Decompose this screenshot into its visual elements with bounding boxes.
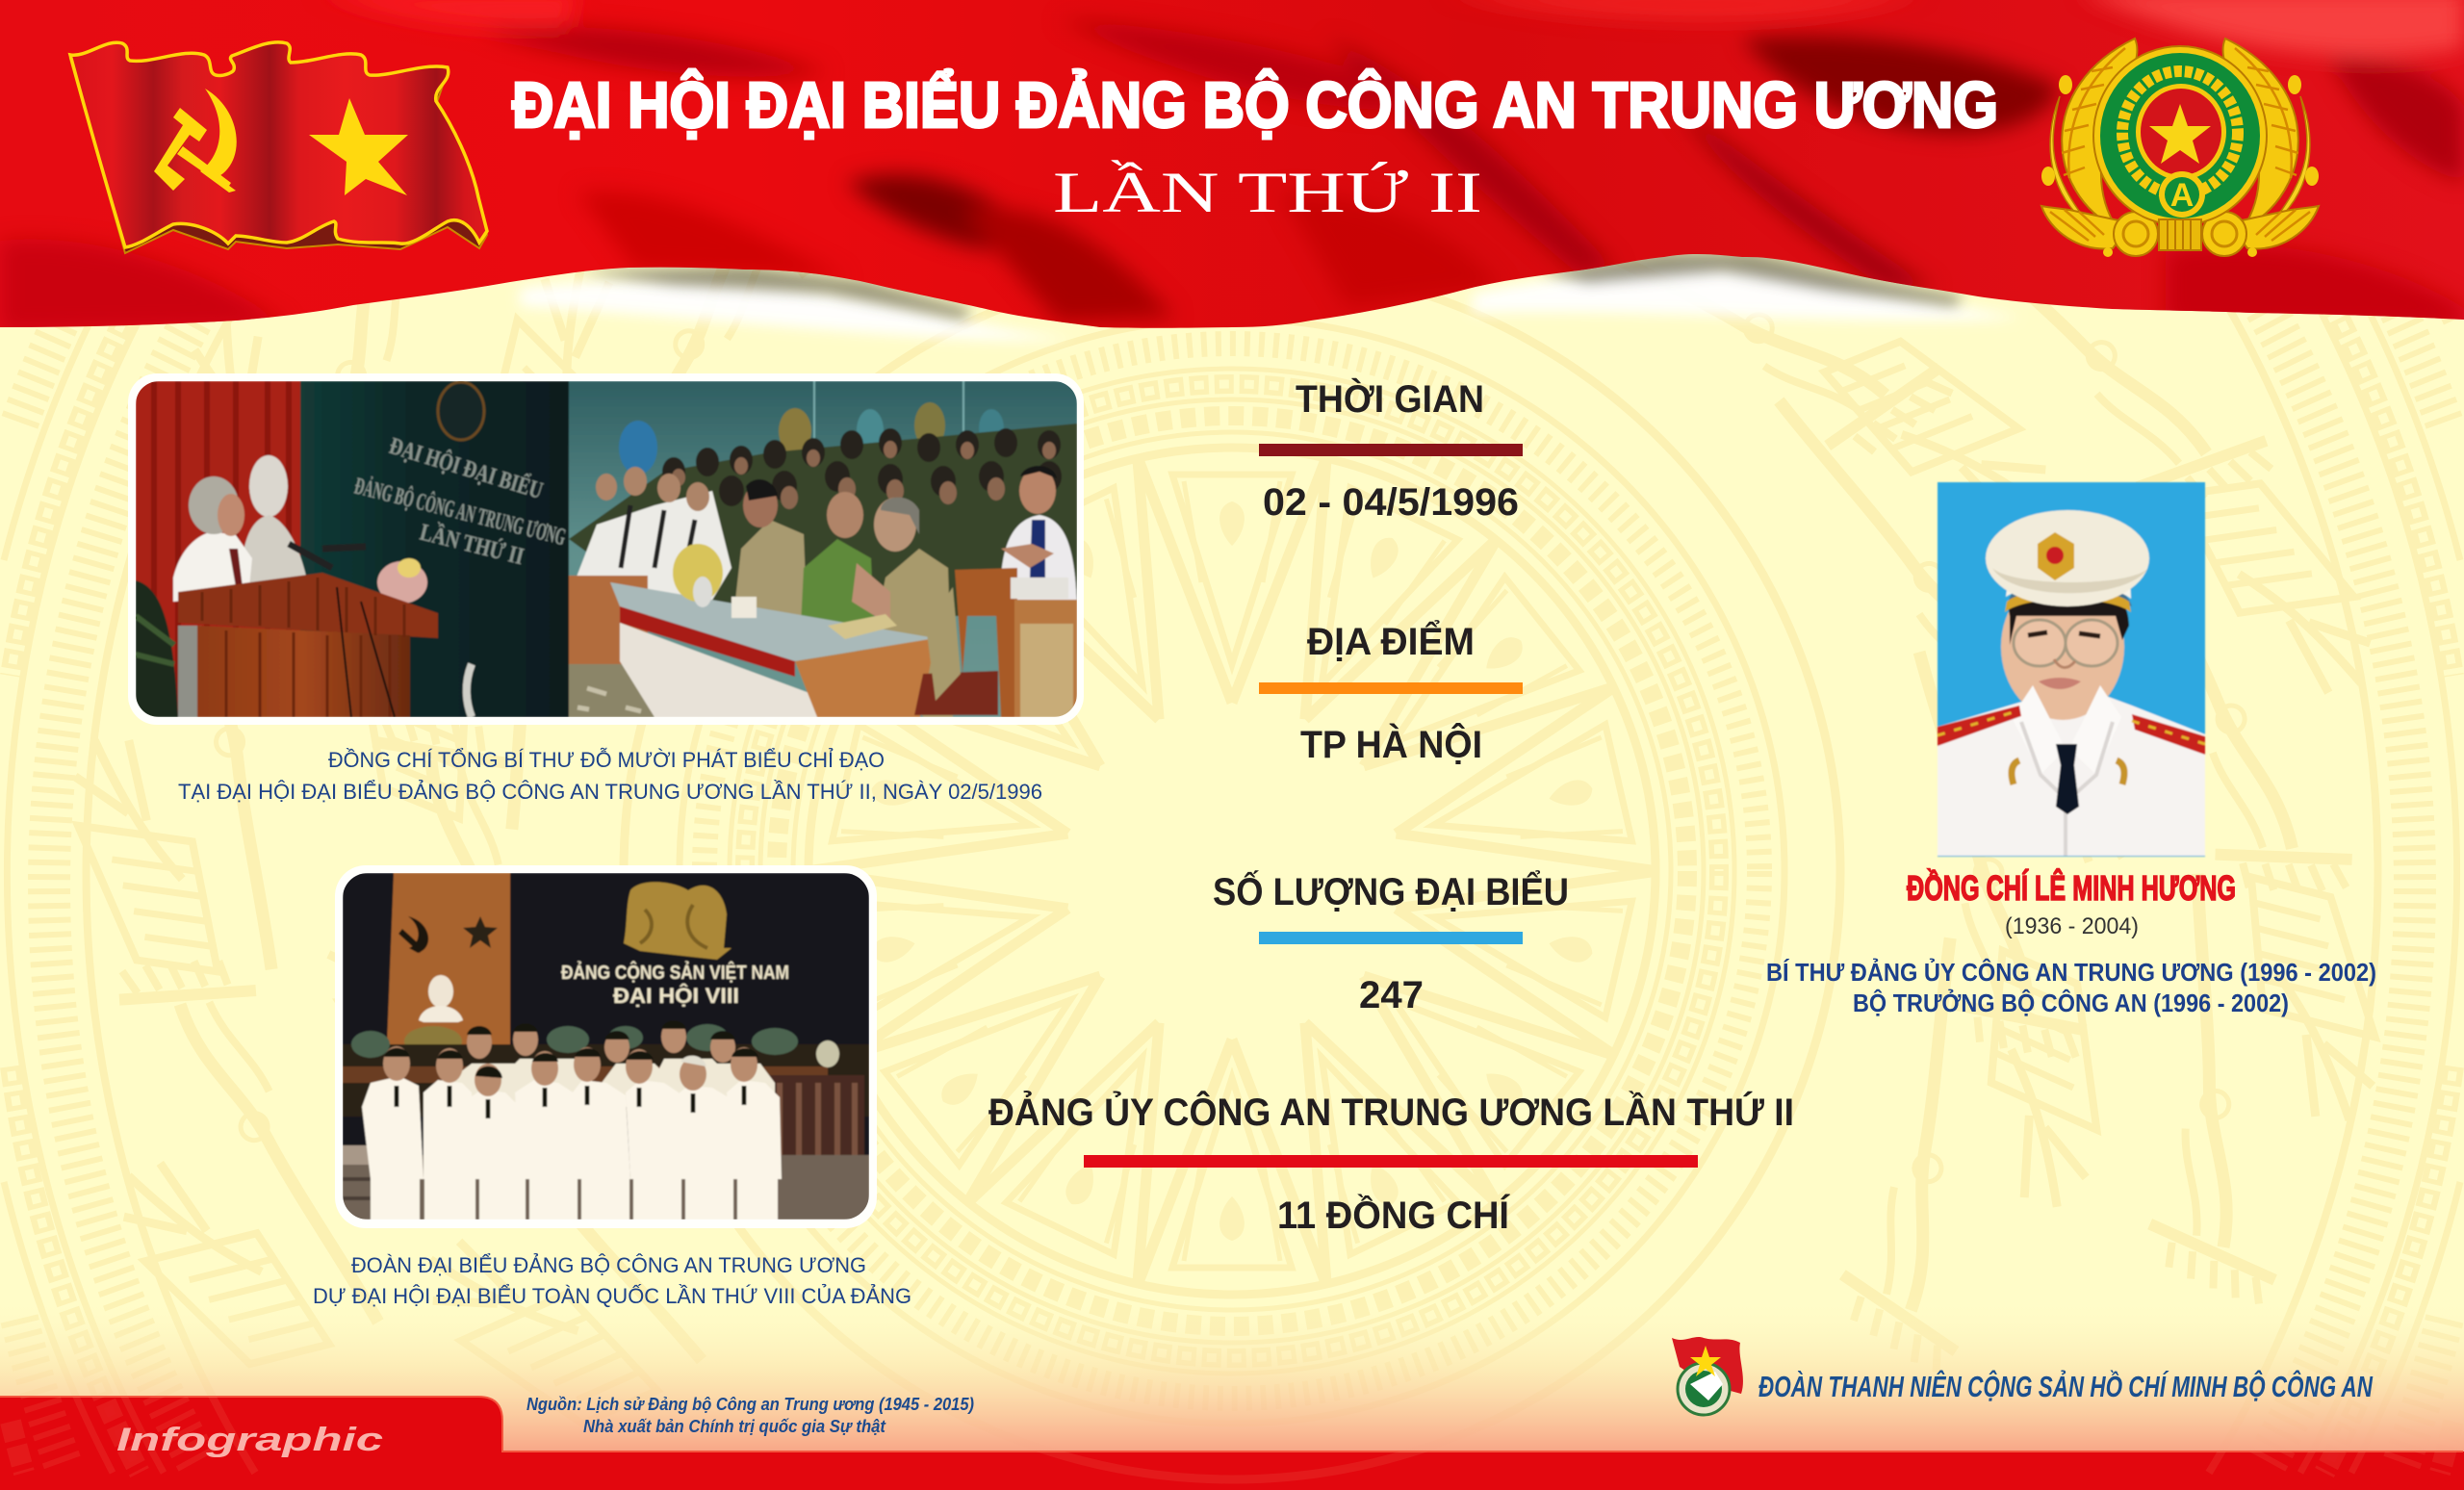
fact: party committee: 11 ĐỒNG CHÍ bbox=[1277, 1193, 1510, 1237]
panel: header banner bbox=[0, 0, 2464, 341]
source note bbox=[526, 1395, 974, 1436]
caption: congress speech: TẠI ĐẠI HỘI ĐẠI BIỂU ĐẢNG BỘ CÔNG AN TRUNG ƯƠNG LẦN THỨ II, NGÀY 02/5/1996 bbox=[178, 780, 1042, 804]
fact: delegates: 247 bbox=[1359, 974, 1424, 1016]
photo: portrait bbox=[1938, 482, 2205, 857]
wave shadow bbox=[520, 252, 2021, 341]
fact: place: ĐỊA ĐIỂM bbox=[1307, 618, 1475, 663]
fact: party committee bbox=[988, 1090, 1794, 1237]
footer band bbox=[0, 1396, 2464, 1490]
fact: place: TP HÀ NỘI bbox=[1300, 722, 1482, 766]
subtitle: LẦN THỨ II bbox=[1053, 161, 1482, 224]
red flag cloth bbox=[0, 0, 2464, 332]
fact: delegates bbox=[1213, 868, 1569, 1016]
icon: hammer and sickle bbox=[154, 89, 237, 193]
fact: place bbox=[1259, 618, 1523, 766]
footer label: Infographic bbox=[116, 1422, 383, 1458]
title: ĐẠI HỘI ĐẠI BIỂU ĐẢNG BỘ CÔNG AN TRUNG ƯƠNG bbox=[512, 69, 1998, 141]
icon: gold star bbox=[309, 98, 408, 195]
panel: congress facts bbox=[988, 376, 1794, 1237]
source note: Nguồn: Lịch sử Đảng bộ Công an Trung ương (1945 - 2015) bbox=[526, 1395, 974, 1414]
fact: time: 02 - 04/5/1996 bbox=[1263, 481, 1519, 524]
fact: time: THỜI GIAN bbox=[1296, 376, 1484, 421]
photo: congress speech: ĐẢNG BỘ CÔNG AN TRUNG ƯƠNG bbox=[352, 472, 569, 551]
person roles: BÍ THƯ ĐẢNG ỦY CÔNG AN TRUNG ƯƠNG (1996 - 2002) bbox=[1766, 957, 2376, 987]
person roles bbox=[1766, 957, 2376, 1017]
fact: party committee: ĐẢNG ỦY CÔNG AN TRUNG ƯƠNG LẦN THỨ II bbox=[988, 1090, 1794, 1134]
source note: Nhà xuất bản Chính trị quốc gia Sự thật bbox=[583, 1417, 886, 1436]
icon: party flag bbox=[70, 42, 487, 253]
fact: delegates: SỐ LƯỢNG ĐẠI BIỂU bbox=[1213, 868, 1569, 913]
icon: youth union logo bbox=[1672, 1337, 1743, 1415]
icon: police emblem: A bbox=[2170, 177, 2194, 214]
caption: delegation bbox=[313, 1253, 911, 1308]
photo: congress speech: LẦN THỨ II bbox=[418, 518, 526, 570]
footer fade bbox=[0, 1295, 2464, 1453]
person name: ĐỒNG CHÍ LÊ MINH HƯƠNG bbox=[1907, 867, 2236, 908]
caption: congress speech: ĐỒNG CHÍ TỔNG BÍ THƯ ĐỖ MƯỜI PHÁT BIỂU CHỈ ĐẠO bbox=[328, 747, 885, 772]
photo: delegation at 8th congress: ĐẢNG CỘNG SẢN VIỆT NAM bbox=[561, 961, 789, 984]
person roles: BỘ TRƯỞNG BỘ CÔNG AN (1996 - 2002) bbox=[1853, 988, 2289, 1017]
photo: congress speech bbox=[128, 373, 1084, 725]
caption: congress speech bbox=[178, 747, 1042, 804]
caption: delegation: DỰ ĐẠI HỘI ĐẠI BIỂU TOÀN QUỐC LẦN THỨ VIII CỦA ĐẢNG bbox=[313, 1283, 911, 1308]
icon: police emblem bbox=[2041, 39, 2319, 257]
photo: delegation at 8th congress bbox=[335, 865, 877, 1228]
caption: delegation: ĐOÀN ĐẠI BIỂU ĐẢNG BỘ CÔNG AN TRUNG ƯƠNG bbox=[351, 1253, 866, 1277]
photo: delegation at 8th congress: ĐẠI HỘI VIII bbox=[613, 984, 739, 1008]
fact: time bbox=[1259, 376, 1523, 524]
photo: congress speech: ĐẠI HỘI ĐẠI BIỂU bbox=[386, 431, 547, 504]
person years: (1936 - 2004) bbox=[2005, 913, 2139, 939]
